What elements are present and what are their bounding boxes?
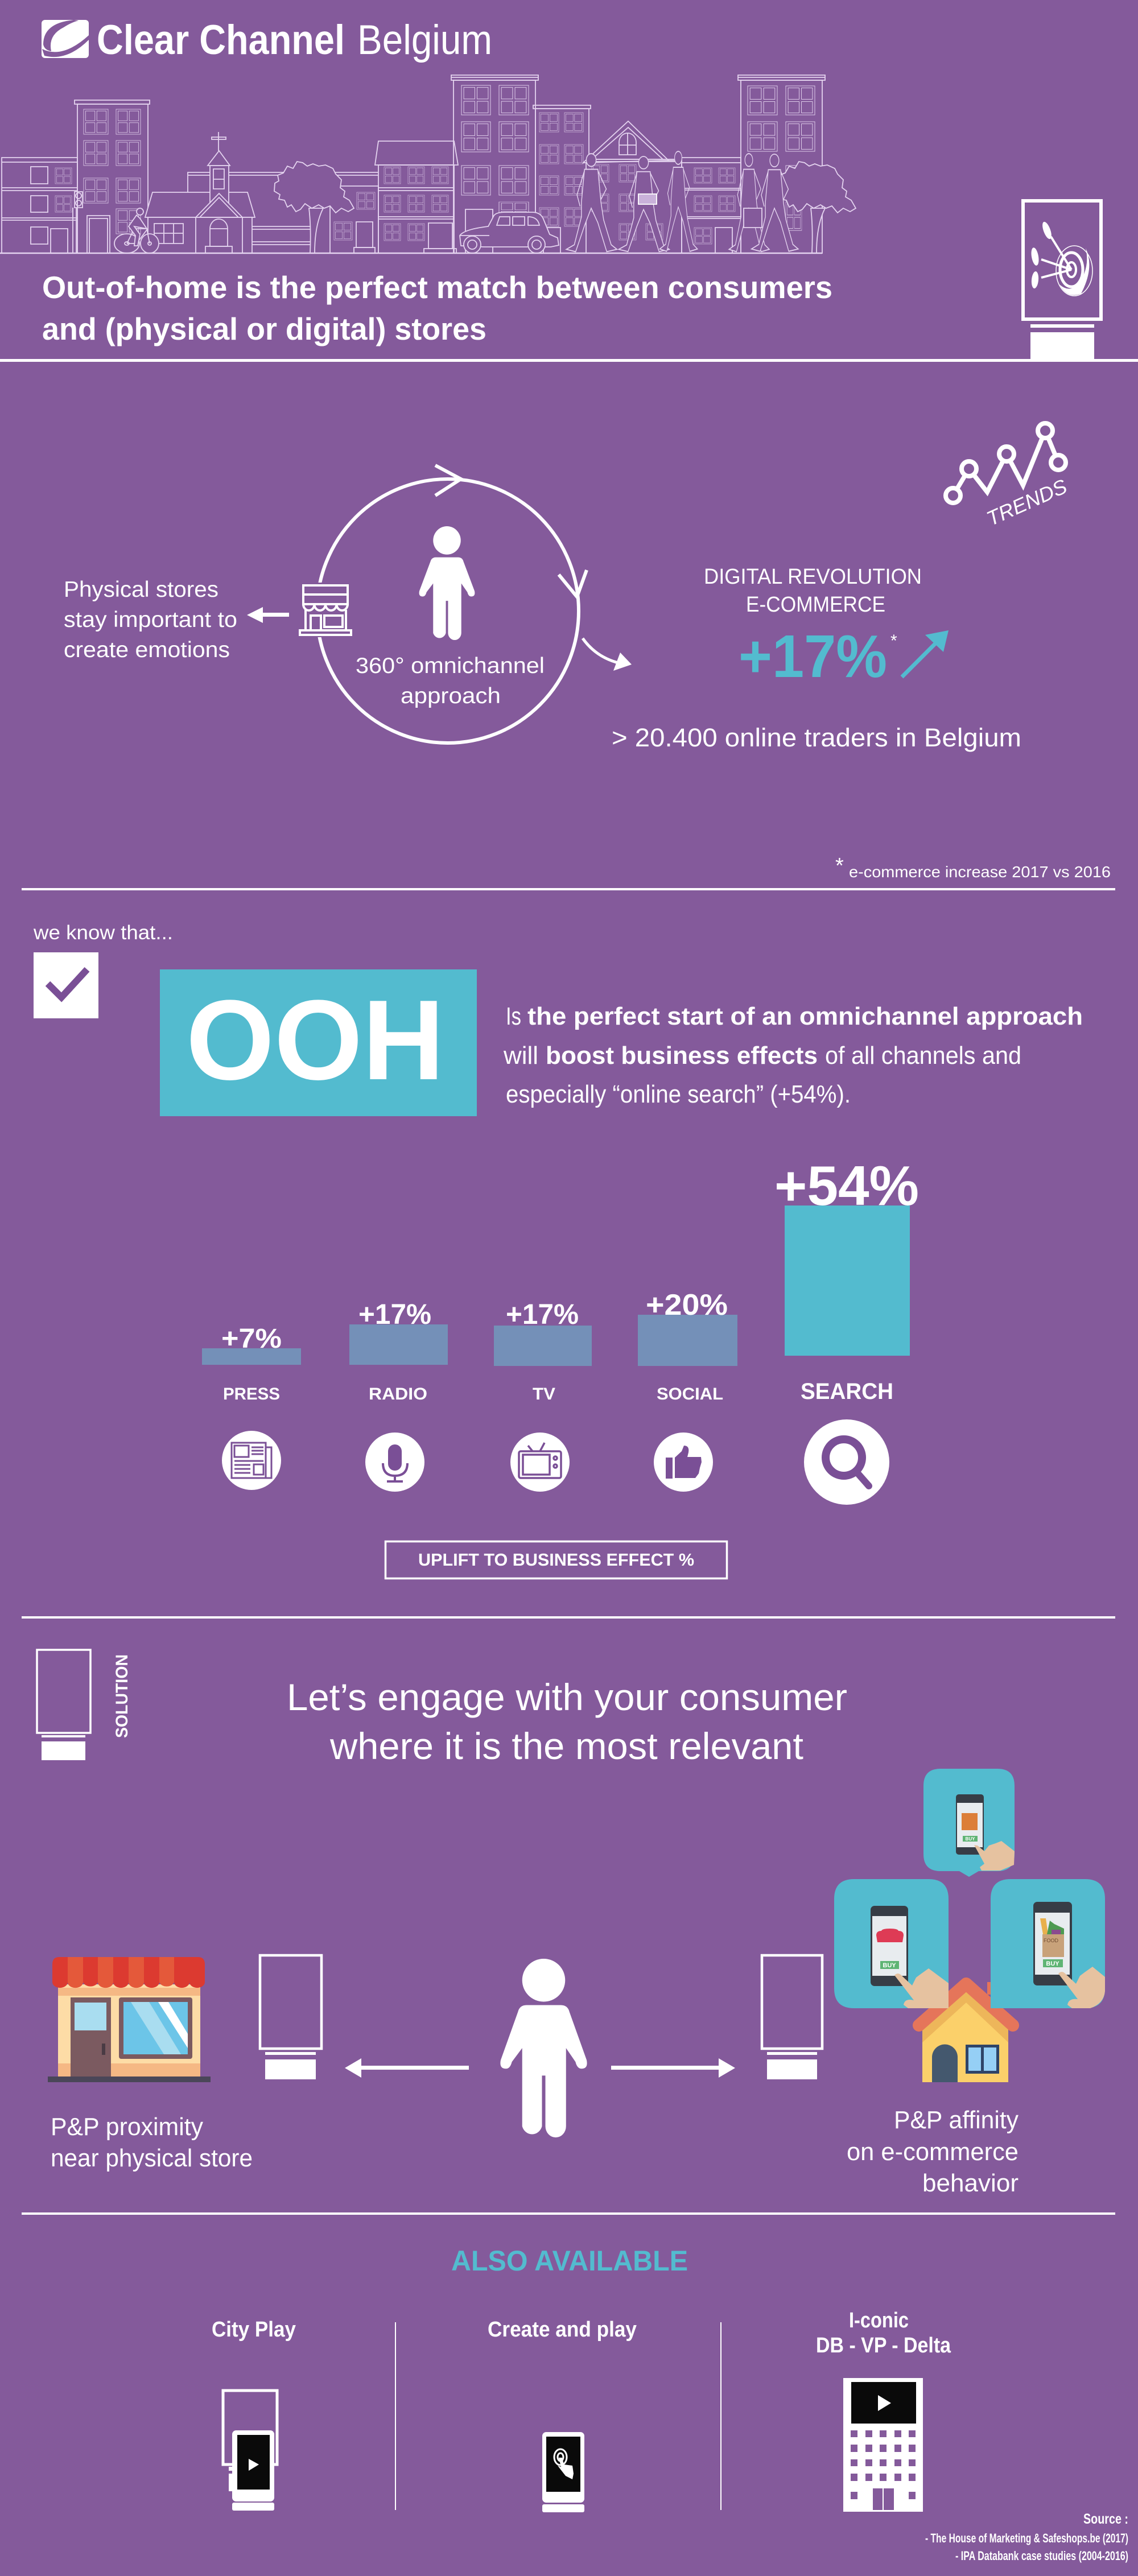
church [145, 132, 255, 253]
traffic light [73, 192, 83, 253]
column: i-conic: DB - VP - Delta [816, 2334, 951, 2358]
logo text: Clear Channel [97, 17, 345, 63]
narrow building [533, 105, 591, 253]
illustration: city skyline [0, 75, 856, 253]
text: OOH statement: boost business effects [546, 1042, 818, 1070]
icon: search [804, 1419, 889, 1505]
bar: search [774, 1154, 919, 1404]
text: OOH statement: Is [506, 1002, 521, 1030]
text: digital revolution heading: DIGITAL REVOLUTION [704, 565, 922, 589]
text: physical stores: create emotions [64, 638, 230, 662]
icon: tv [510, 1433, 570, 1492]
bar chart: uplift [202, 1154, 919, 1404]
icon: solution billboard [37, 1650, 90, 1760]
icon: Clear Channel mark [42, 20, 89, 58]
hand [894, 1968, 949, 2008]
icon: radio microphone [365, 1433, 424, 1492]
heading: engage: where it is the most relevant [329, 1725, 803, 1767]
phone: BUY [966, 1836, 975, 1842]
label: solution: SOLUTION [113, 1654, 131, 1738]
divider [0, 359, 1138, 362]
panel: digital revolution [612, 565, 1021, 752]
source notes [925, 2511, 1128, 2563]
title [42, 270, 832, 346]
column dividers [395, 2322, 721, 2510]
column: create and play [488, 2318, 637, 2512]
icon: person [419, 526, 475, 640]
ground line [0, 253, 822, 254]
column: create and play: Create and play [488, 2318, 637, 2342]
text: affinity [847, 2106, 1019, 2197]
icon: social thumbs up [654, 1433, 713, 1492]
bar: press: PRESS [223, 1385, 280, 1403]
title: and (physical or digital) stores [42, 311, 486, 346]
tree right [776, 162, 856, 253]
pedestrians [566, 151, 798, 251]
panel: OOH: OOH [186, 977, 444, 1104]
text: affinity: on e-commerce [847, 2138, 1019, 2166]
tall right building [738, 75, 825, 253]
icon: touch screen [542, 2432, 584, 2512]
icon: trends: TRENDS [983, 474, 1070, 530]
text: OOH statement: especially “online search” (+54%). [506, 1080, 851, 1108]
legend box: uplift: UPLIFT TO BUSINESS EFFECT % [418, 1550, 694, 1570]
bar: search: SEARCH [801, 1379, 893, 1404]
text: OOH statement: of all channels and [825, 1042, 1021, 1070]
divider [22, 1616, 1115, 1619]
text: OOH statement: the perfect start of an omnichannel approach [527, 1002, 1083, 1030]
bubble: right phone food [991, 1879, 1105, 2008]
text: proximity [51, 2113, 253, 2172]
text: online traders: > 20.400 online traders in Belgium [612, 723, 1021, 752]
icon: i-conic building [843, 2378, 923, 2512]
hand [1058, 1967, 1105, 2008]
icon: house [919, 1982, 1013, 2082]
phone [956, 1794, 984, 1855]
circular arrow [317, 465, 587, 743]
bar: tv: TV [533, 1385, 555, 1403]
text: 360 omnichannel approach: approach [401, 684, 501, 708]
arrow: left [345, 2058, 469, 2078]
taxi car [460, 212, 559, 253]
bar: press [202, 1324, 301, 1403]
tall middle building [451, 75, 538, 253]
bar: social: +20% [646, 1289, 728, 1322]
footnote: * [835, 854, 844, 878]
arrow: to physical stores [247, 607, 289, 623]
text: 360 omnichannel approach [356, 654, 545, 708]
bar: tv: +17% [506, 1298, 579, 1330]
icon: city play [223, 2391, 277, 2511]
stat: +17%: +17% [739, 623, 887, 690]
text: affinity: P&P affinity [894, 2106, 1019, 2134]
icon: person centre [500, 1959, 587, 2137]
icon: checkbox [34, 952, 98, 1018]
tree left [274, 162, 354, 253]
mid building [375, 141, 458, 253]
header: logo [42, 17, 492, 63]
phone [1033, 1902, 1072, 1985]
text: physical stores [64, 577, 237, 662]
column: city play [212, 2318, 296, 2511]
column: city play: City Play [212, 2318, 296, 2342]
bubble: left phone sofa [834, 1879, 949, 2008]
text: digital revolution heading [704, 565, 922, 617]
text: OOH statement [503, 1002, 1083, 1108]
icon: billboard right [762, 1955, 822, 2079]
bar: social: SOCIAL [657, 1385, 723, 1403]
bar: search: +54% [774, 1154, 919, 1217]
arrow: curved to digital [583, 638, 632, 671]
gabled house [583, 121, 682, 253]
bar: tv [494, 1298, 592, 1403]
bar: social [638, 1289, 737, 1403]
footnote [835, 854, 1111, 881]
heading: engage [287, 1676, 847, 1767]
tall left building [75, 100, 150, 253]
text: physical stores: stay important to [64, 608, 237, 632]
icon: physical store [48, 1957, 211, 2082]
text: physical stores: Physical stores [64, 577, 218, 602]
icon: trends [946, 423, 1070, 530]
bar: press: +7% [221, 1324, 282, 1354]
text: proximity: P&P proximity [51, 2113, 203, 2141]
column: i-conic: I-conic [849, 2309, 909, 2333]
divider [22, 888, 1115, 890]
text: OOH statement: will [503, 1042, 538, 1070]
right low building [682, 158, 741, 253]
logo text: Belgium [357, 17, 492, 63]
left low building [2, 158, 77, 253]
text: proximity: near physical store [51, 2144, 253, 2172]
phone: BUY [1046, 1960, 1059, 1967]
bubble: top phone bag [923, 1769, 1015, 1877]
awning [52, 1957, 205, 1988]
icon: store [299, 583, 352, 637]
back wall [188, 172, 378, 245]
bar: radio [349, 1298, 448, 1403]
small house [330, 186, 378, 253]
heading: also available: ALSO AVAILABLE [451, 2245, 688, 2277]
heading: engage: Let’s engage with your consumer [287, 1676, 847, 1718]
legend box: uplift [386, 1542, 727, 1578]
column: i-conic [816, 2309, 951, 2512]
phone: BUY [883, 1962, 896, 1969]
icon: billboard left [260, 1955, 321, 2079]
panel: 360 omnichannel [64, 465, 632, 743]
icon: press [222, 1431, 281, 1490]
title: Out-of-home is the perfect match between consumers [42, 270, 832, 305]
phone [871, 1906, 908, 1986]
bar: radio: RADIO [369, 1385, 427, 1403]
phone: FOOD [1044, 1938, 1058, 1943]
hand [974, 1841, 1015, 1871]
text: we know that: we know that... [33, 922, 173, 944]
text: digital revolution heading: E-COMMERCE [746, 593, 885, 617]
text: 360 omnichannel approach: 360° omnichannel [356, 654, 545, 678]
footnote: e-commerce increase 2017 vs 2016 [849, 863, 1111, 881]
icon: billboard with darts [1023, 201, 1101, 360]
icon: target [1030, 221, 1092, 296]
cyclist [114, 208, 159, 253]
arrow: right [611, 2058, 735, 2078]
divider [22, 2212, 1115, 2215]
bar: radio: +17% [358, 1298, 431, 1330]
arrow: teal up [902, 630, 949, 677]
asterisk: * [890, 631, 897, 650]
store door [71, 1997, 111, 2077]
text: affinity: behavior [922, 2169, 1019, 2197]
store window [119, 1997, 192, 2059]
